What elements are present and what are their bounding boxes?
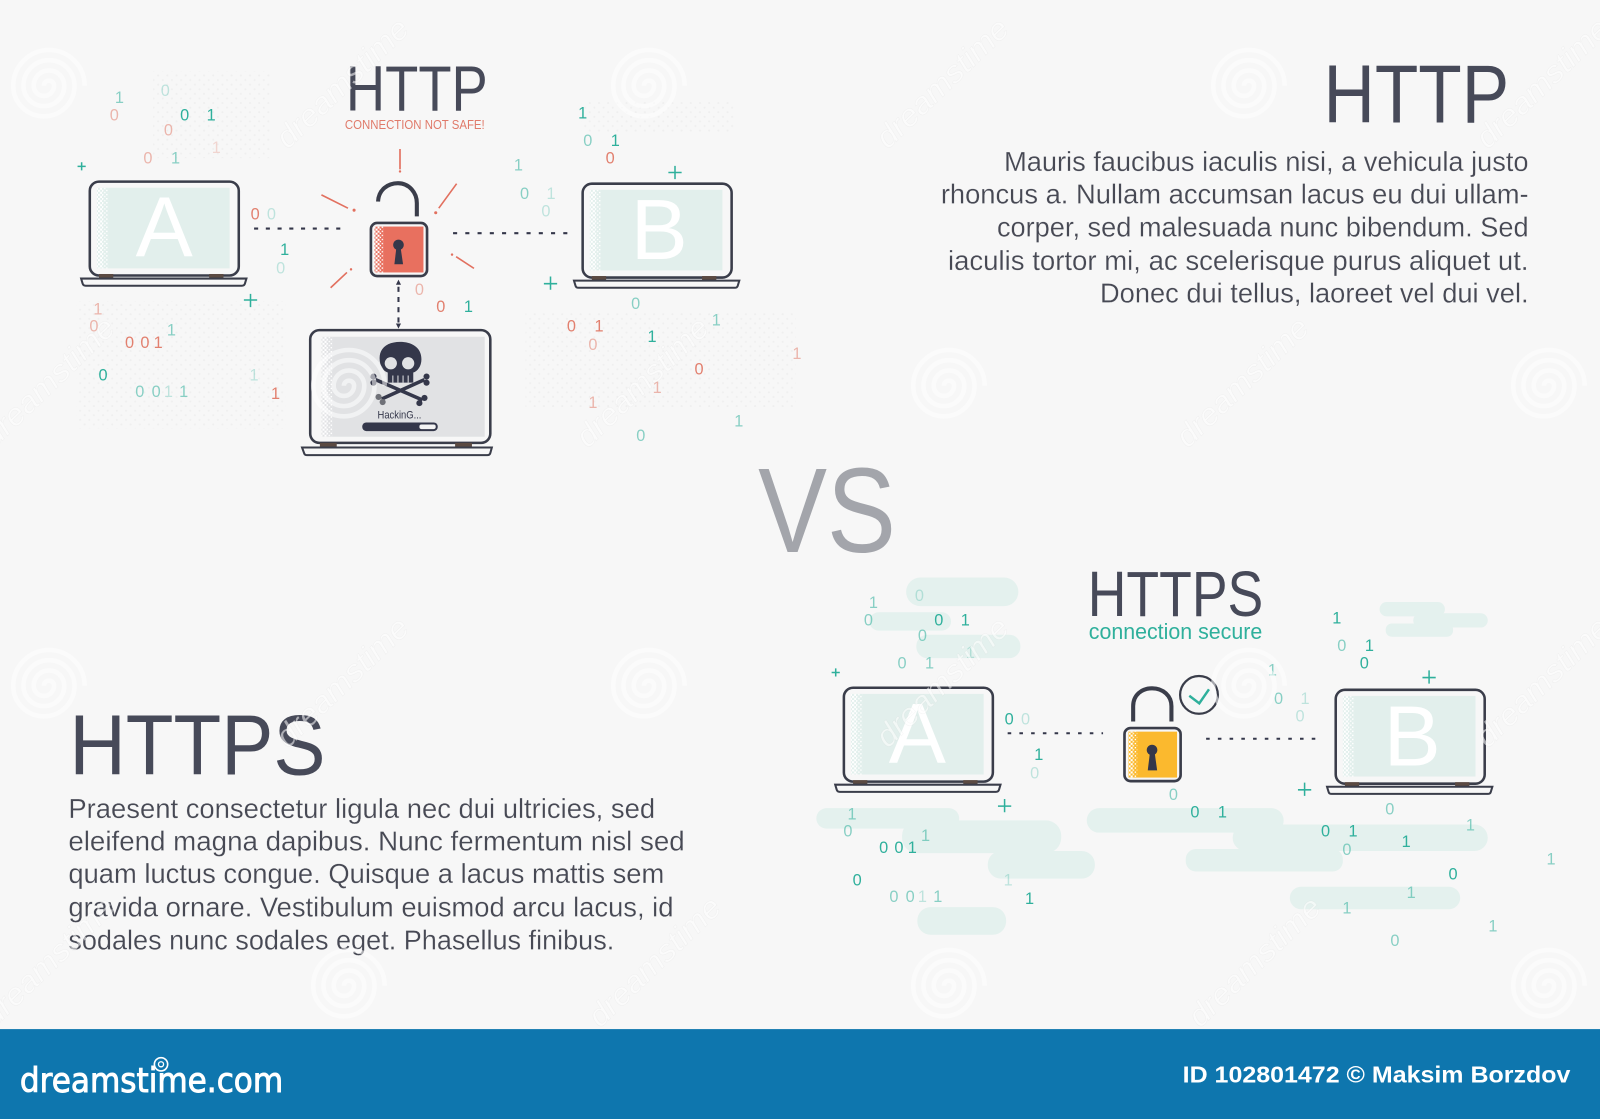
binary digits: HTTP: 0 [143,149,152,167]
halftone background: HTTP diagram [77,71,796,429]
binary digits: HTTPS: 1 [1407,884,1416,902]
heading: HTTP: HTTP [1323,47,1509,140]
panel: HTTP diagram [78,53,801,455]
watermark overlay: dreamstime [869,12,1016,155]
footer credit: ID 102801472 © Maksim Borzdov [1183,1062,1570,1088]
binary digits: HTTPS: 0 [1030,765,1039,783]
laptop A secure [835,685,1001,792]
watermark overlay: dreamstime [869,610,1016,754]
binary digits: HTTP: 0 [99,367,108,385]
binary digits: HTTPS: 0 [1295,707,1305,725]
binary digits: HTTPS: 0 [879,839,888,857]
hacking label: HackinG... [378,409,421,421]
binary digits: HTTPS: 1 [918,888,927,906]
binary digits: HTTP: 0 [140,334,149,352]
binary digits: HTTPS: 0 [1337,637,1346,655]
binary digits: HTTPS: 0 [918,627,927,645]
binary digits: HTTP: 1 [115,89,124,107]
footer bar [0,1029,1600,1119]
watermark overlay: dreamstime [581,890,728,1034]
watermark overlay: dreamstime [269,610,416,754]
binary digits: HTTP: 1 [792,345,801,363]
binary digits: HTTPS: 0 [1360,654,1369,672]
laptop B: B [631,182,688,278]
binary digits: HTTPS: 1 [1218,803,1227,821]
text block: HTTP description: corper, sed malesuada nunc bibendum. Sed [997,212,1529,243]
icon: open padlock [371,183,427,276]
binary digits: HTTPS: 0 [1005,711,1014,729]
binary digits: HTTPS: 1 [1301,690,1310,708]
binary digits: HTTP: 1 [164,383,173,401]
binary digits: HTTP: 0 [135,383,144,401]
binary digits: HTTPS: 0 [1385,800,1394,818]
binary digits: HTTP: 0 [125,334,134,352]
binary digits: HTTPS: 1 [908,839,917,857]
progress bar [362,422,438,431]
dotted connection: lock to B secure [1206,738,1323,740]
text block: HTTP description: Mauris faucibus iaculis nisi, a vehicula justo [1004,146,1529,177]
binary digits: HTTP: 1 [578,104,587,122]
binary digits: HTTPS: 0 [898,654,907,672]
VS label: VS [758,443,896,578]
binary digits: HTTP: 1 [594,318,604,336]
laptop A [81,179,246,286]
binary digits: HTTPS: 1 [1332,609,1341,627]
binary digits: HTTP: 1 [546,185,556,203]
binary digits: HTTPS: 1 [925,654,934,672]
binary digits: HTTP: 0 [606,149,615,167]
footer logo: dreamstime.com [20,1061,283,1100]
binary digits: HTTP: 0 [180,106,189,124]
text block: HTTP description [941,146,1529,309]
binary digits: HTTPS: 1 [921,827,930,845]
binary digits: HTTPS: 1 [1402,833,1411,851]
binary digits: HTTP: 0 [251,205,260,223]
binary digits: HTTP: 1 [712,312,721,330]
binary digits: HTTPS: 1 [869,594,878,612]
binary digits: HTTP [89,82,801,445]
text block: HTTPS description: quam luctus congue. Quisque a lacus mattis sem [68,858,664,889]
plus marks: HTTPS [832,668,1436,812]
heading: HTTPS small: HTTPS [1088,558,1263,630]
binary digits: HTTPS: 0 [894,839,904,857]
laptop: hacker [302,330,492,455]
binary digits: HTTP: 1 [250,367,259,385]
binary digits: HTTP: 1 [611,132,620,150]
binary digits: HTTP: 1 [93,300,102,318]
binary digits: HTTPS: 0 [1321,823,1330,841]
icon: check badge [1180,676,1218,714]
warning label: CONNECTION NOT SAFE! [345,117,485,132]
laptop B secure [1327,688,1492,794]
binary digits: HTTP: 1 [648,328,657,346]
binary digits: HTTPS: 1 [1365,637,1374,655]
binary digits: HTTPS: 1 [1546,850,1556,868]
binary digits: HTTP: 0 [161,82,170,100]
binary digits: HTTP: 1 [280,241,289,259]
binary digits: HTTPS: 0 [906,888,915,906]
binary digits: HTTPS: 0 [1390,932,1399,950]
binary digits: HTTPS: 0 [1274,690,1283,708]
binary digits: HTTPS: 0 [1342,841,1351,859]
binary digits: HTTP: 1 [179,383,188,401]
binary digits: HTTP: 1 [588,394,597,412]
dotted connection: A to lock [254,228,348,230]
binary digits: HTTP: 0 [152,383,161,401]
binary digits: HTTP: 0 [694,361,704,379]
alert rays [321,149,474,288]
binary digits: HTTP: 1 [514,156,523,174]
binary digits: HTTPS: 1 [1342,899,1351,917]
binary digits: HTTPS: 0 [934,612,943,630]
binary digits: HTTPS: 0 [853,872,862,890]
text block: HTTPS description: sodales nunc sodales eget. Phasellus finibus. [68,925,614,956]
laptop B secure: B [1384,688,1441,784]
binary digits: HTTPS: 1 [966,644,975,662]
text block: HTTPS description: Praesent consectetur ligula nec dui ultricies, sed [68,793,655,824]
binary digits: HTTP: 0 [110,106,119,124]
binary digits: HTTP: 0 [583,132,592,150]
binary digits: HTTP: 1 [464,298,473,316]
binary digits: HTTPS: 1 [1488,918,1497,936]
binary digits: HTTP: 1 [167,322,176,340]
binary digits: HTTPS: 0 [864,612,873,630]
icon: closed padlock [1124,688,1181,781]
binary digits: HTTP: 0 [541,202,550,220]
binary digits: HTTPS: 1 [1466,817,1475,835]
status label: connection secure [1089,619,1262,644]
binary digits: HTTPS: 1 [1349,823,1358,841]
binary digits: HTTPS [843,587,1556,950]
text block: HTTPS description [68,793,685,956]
laptop B [574,182,739,288]
watermark overlay: dreamstime [1169,310,1316,454]
binary digits: HTTP: 0 [267,205,276,223]
binary digits: HTTPS: 0 [1449,866,1458,884]
binary digits: HTTP: 1 [154,334,163,352]
binary digits: HTTP: 0 [89,318,98,336]
binary digits: HTTP: 0 [415,281,424,299]
binary digits: HTTPS: 0 [889,888,898,906]
binary digits: HTTPS: 1 [1025,890,1034,908]
binary digits: HTTPS: 1 [1268,662,1277,680]
heading: HTTPS: HTTPS [69,698,326,794]
heading: HTTP small: HTTP [346,53,488,125]
laptop A: A [136,179,193,275]
binary digits: HTTPS: 1 [933,888,942,906]
dotted connection: lock to hacker [396,280,401,329]
binary digits: HTTP: 0 [636,427,645,445]
binary digits: HTTPS: 1 [961,612,970,630]
binary digits: HTTP: 0 [520,185,529,203]
icon: skull and crossbones [370,342,430,406]
panel: HTTPS diagram [816,558,1556,950]
plus marks: HTTP [78,162,682,307]
dotted connection: A to lock secure [1008,732,1103,734]
binary digits: HTTP: 0 [276,259,285,277]
watermark overlay: dreamstime [569,310,716,454]
dotted connection: lock to B [453,232,569,234]
text block: HTTP description: rhoncus a. Nullam accumsan lacus eu dui ullam- [941,179,1529,210]
text block: HTTP description: Donec dui tellus, laoreet vel dui vel. [1100,278,1529,309]
background smears [816,578,1488,935]
binary digits: HTTP: 0 [588,336,597,354]
binary digits: HTTP: 0 [164,122,173,140]
binary digits: HTTP: 1 [171,149,180,167]
binary digits: HTTPS: 0 [1169,786,1178,804]
text block: HTTPS description: eleifend magna dapibus. Nunc fermentum nisl sed [68,826,685,857]
binary digits: HTTPS: 0 [1190,803,1199,821]
text block: HTTP description: iaculis tortor mi, ac scelerisque purus aliquet ut. [948,245,1529,276]
binary digits: HTTPS: 1 [848,805,857,823]
binary digits: HTTP: 1 [653,379,662,397]
binary digits: HTTPS: 0 [1021,711,1030,729]
watermark overlay: dreamstime [1181,890,1328,1034]
binary digits: HTTP: 1 [734,413,743,431]
text block: HTTPS description: gravida ornare. Vestibulum euismod arcu lacus, id [68,891,673,922]
binary digits: HTTP: 0 [567,318,576,336]
binary digits: HTTPS: 0 [843,823,852,841]
binary digits: HTTP: 1 [212,139,221,157]
binary digits: HTTP: 0 [436,298,445,316]
laptop A secure: A [889,685,946,781]
binary digits: HTTPS: 0 [915,587,924,605]
binary digits: HTTP: 1 [271,385,280,403]
watermark overlay: dreamstime [269,12,416,155]
binary digits: HTTPS: 1 [1004,872,1013,890]
binary digits: HTTP: 1 [207,106,216,124]
binary digits: HTTPS: 1 [1034,746,1043,764]
binary digits: HTTP: 0 [631,295,640,313]
